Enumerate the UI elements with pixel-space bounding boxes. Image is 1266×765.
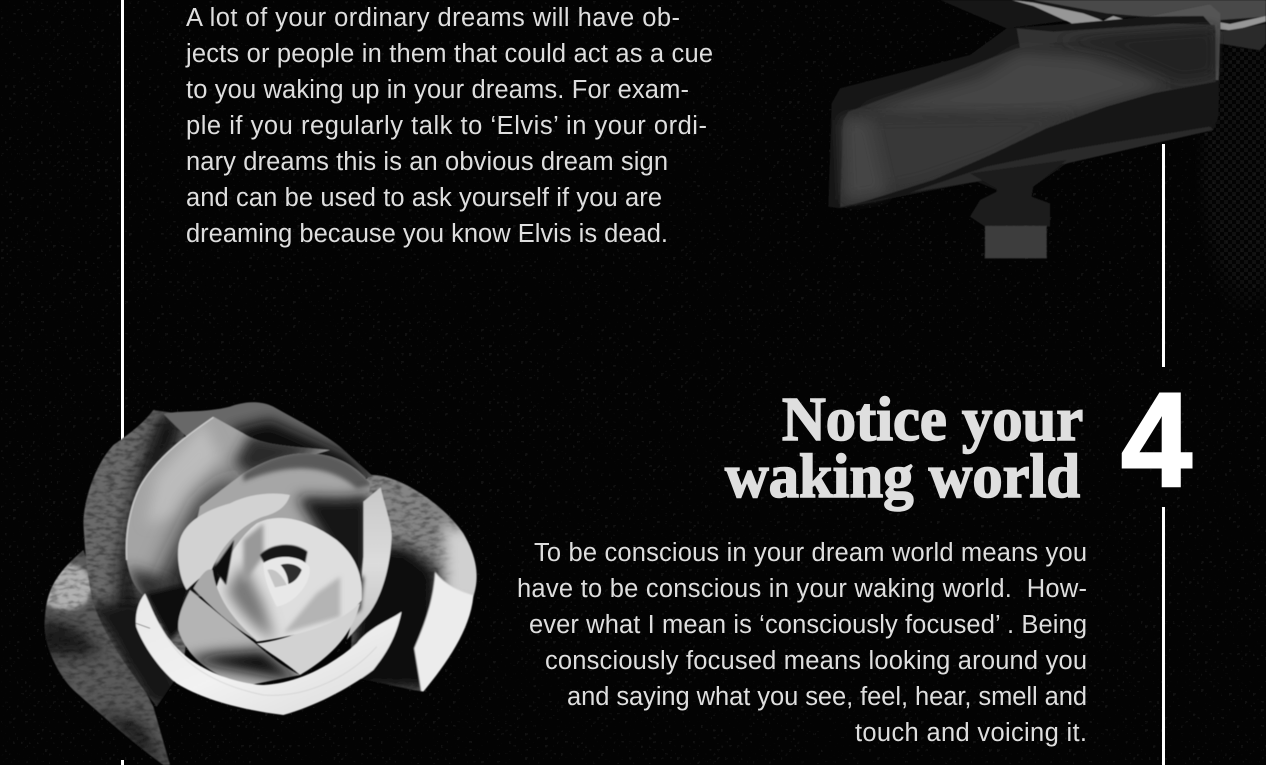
third petal: [197, 453, 370, 578]
mirror frame: [828, 4, 1221, 208]
lower-left petal: [44, 550, 170, 765]
text block: dream signs: to you waking up in your dreams. For exam-: [186, 76, 689, 104]
folded inner petal: [193, 569, 258, 642]
mirror top landscape band: [940, 0, 1266, 51]
right pale strip of third petal: [347, 487, 392, 640]
right outer petal: [350, 474, 478, 692]
text block: being consciously focused: have to be conscious in your waking world. How-: [517, 575, 1087, 603]
text block: dream signs: and can be used to ask yourself if you are: [186, 184, 662, 212]
text block: being consciously focused: touch and voicing it.: [855, 719, 1087, 747]
pale left petal: [178, 493, 290, 590]
big bottom white petal: [136, 593, 402, 715]
large pale cup petal: [120, 413, 337, 603]
rose heart petals: [216, 518, 362, 642]
text block: being consciously focused: consciously focused means looking around you: [545, 647, 1087, 675]
mirror stem: [970, 160, 1067, 227]
text block: dream signs: dreaming because you know Elvis is dead.: [186, 220, 668, 248]
rose core spiral: [260, 545, 307, 568]
step number 4: 4: [1121, 366, 1192, 515]
mirror base: [985, 226, 1047, 258]
mirror glass: [840, 30, 1217, 207]
heading: Notice your waking world: waking world: [725, 443, 1080, 511]
text block: dream signs: jects or people in them that could act as a cue: [185, 40, 713, 68]
image: rear-view mirror reflecting mountains: [828, 0, 1266, 258]
left vertical rule: [121, 0, 124, 765]
text block: dream signs: nary dreams this is an obvious dream sign: [186, 148, 668, 176]
left dark petal: [82, 410, 187, 707]
text block: being consciously focused: ever what I mean is ‘consciously focused’ . Being: [529, 611, 1087, 639]
lower right cup: [257, 603, 360, 675]
mirror forest: [853, 82, 1217, 205]
image: black and white rose: [30, 397, 490, 765]
text block: being consciously focused: and saying what you see, feel, hear, smell and: [567, 683, 1087, 711]
right vertical rule: [1162, 144, 1165, 765]
text block: dream signs: ple if you regularly talk to ‘Elvis’ in your ordi-: [186, 112, 707, 140]
top back petal: [164, 402, 373, 478]
heading: Notice your waking world: Notice your: [782, 386, 1083, 454]
dark shadows around the heart: [187, 563, 230, 597]
lower inner petal: [177, 590, 300, 685]
text block: dream signs: A lot of your ordinary dreams will have ob-: [186, 4, 680, 32]
text block: being consciously focused: To be conscious in your dream world means you: [534, 539, 1087, 567]
